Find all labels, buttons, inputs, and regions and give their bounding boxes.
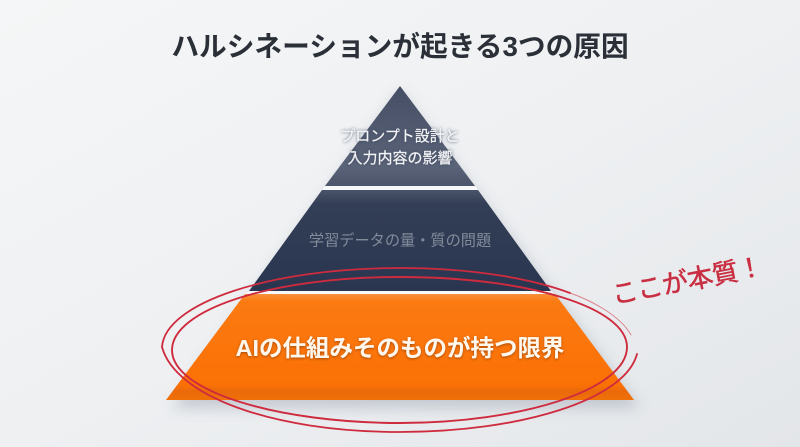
tier 3: AI limits	[166, 294, 634, 400]
tier 3 label: AIの仕組みそのものが持つ限界	[236, 334, 564, 361]
handwritten note: ここが本質！	[609, 251, 765, 310]
tier 1 label: プロンプト設計と	[340, 128, 460, 145]
title: ハルシネーションが起きる3つの原因	[171, 31, 629, 62]
pyramid shadow	[172, 92, 640, 408]
red hand-drawn ellipses	[162, 268, 637, 432]
tier 2: training data	[249, 190, 551, 291]
tier 1: prompt design	[325, 86, 475, 186]
tier 1 label: 入力内容の影響	[347, 150, 453, 167]
pyramid	[166, 86, 640, 408]
tier 2 label: 学習データの量・質の問題	[309, 232, 491, 250]
